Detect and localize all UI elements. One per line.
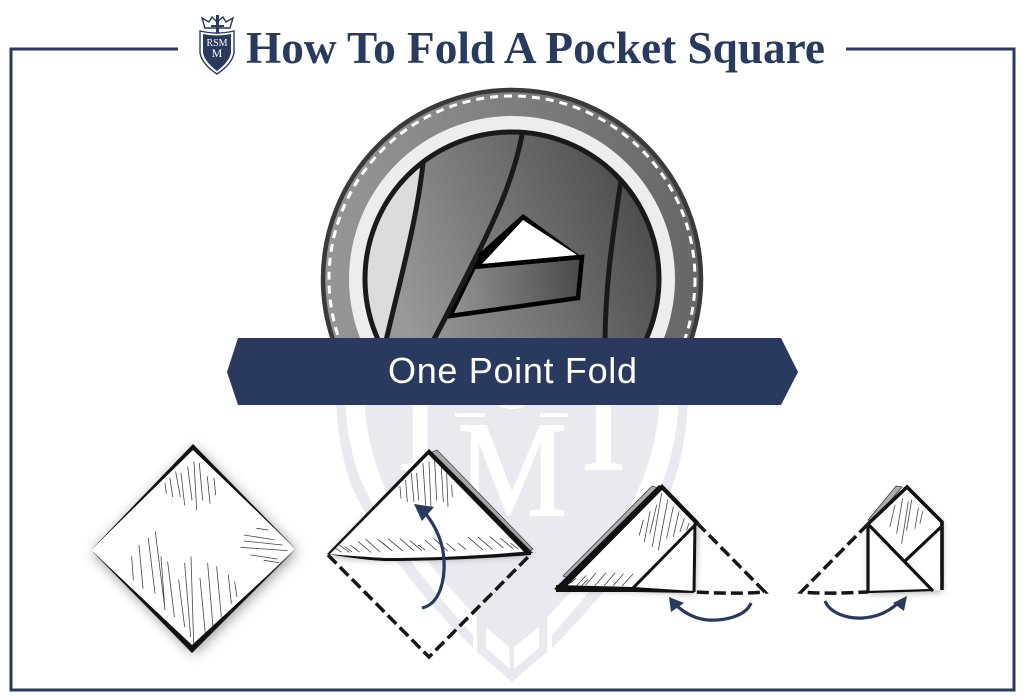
step 3: fold right corner in <box>554 484 765 620</box>
arrow left <box>677 603 751 620</box>
arrow up <box>422 514 444 608</box>
folded shape <box>558 487 697 592</box>
pocket square point <box>475 214 580 265</box>
step 1: open diamond <box>91 444 296 653</box>
dashed flap outline <box>694 523 765 593</box>
watermark crest: I <box>581 349 626 499</box>
watermark crest: M <box>458 395 567 545</box>
dashed flap outline <box>801 524 868 593</box>
rear layer sliver <box>868 486 902 520</box>
logo: crest with crown and sword: M <box>212 46 223 60</box>
banner label: One Point Fold <box>388 350 637 391</box>
banner <box>227 338 798 405</box>
folded shape <box>868 487 942 592</box>
watermark crest <box>336 349 688 682</box>
rear layer sliver <box>430 450 533 552</box>
arrow right <box>825 601 897 618</box>
logo: crest with crown and sword <box>200 15 234 74</box>
breast pocket <box>450 257 582 316</box>
illustration: jacket pocket medallion <box>320 88 704 338</box>
title: How To Fold A Pocket Square <box>246 23 825 73</box>
rear layer sliver <box>563 486 658 578</box>
logo: crest with crown and sword: RSM <box>206 38 228 49</box>
watermark crest: I <box>397 349 443 499</box>
step 4: fold left corner in <box>801 486 942 618</box>
folded triangle <box>328 451 531 558</box>
step 2: fold bottom corner up <box>327 449 533 657</box>
dashed lower half <box>328 554 531 657</box>
